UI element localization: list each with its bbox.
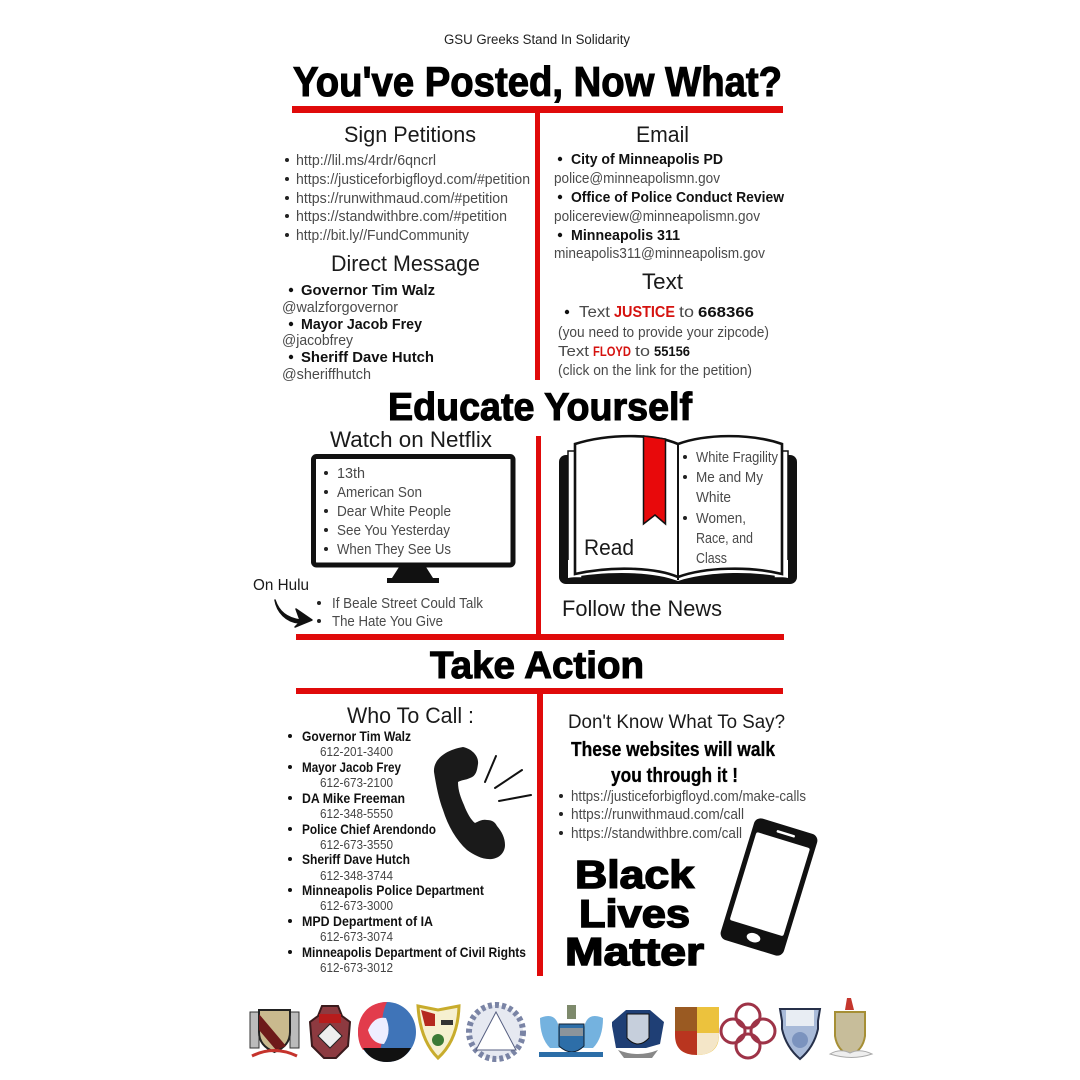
phone contacts list: Mayor Jacob Frey [302,760,401,775]
phone contacts list: 612-201-3400 [320,745,393,759]
book titles list: Women, [696,511,746,527]
heading: don't know what to say: Don't Know What To Say? [568,712,785,733]
email contacts: police@minneapolismn.gov [554,171,721,187]
crest 6 [539,1005,603,1057]
phone contacts list: 612-673-3550 [320,838,393,852]
text justice instruction: Text [579,304,611,321]
slogan: black lives matter: Matter [565,931,704,974]
email contacts [554,152,785,262]
phone contacts list: Minneapolis Department of Civil Rights [302,945,526,960]
panel: text campaigns [558,269,769,379]
netflix titles list [324,466,451,558]
petition links list: https://justiceforbigfloyd.com/#petition [296,172,530,188]
crest 7 [612,1010,664,1058]
netflix titles list: American Son [337,485,422,501]
heading: sign petitions: Sign Petitions [344,122,476,147]
panel: email [554,122,785,262]
netflix titles list: Dear White People [337,504,451,520]
direct message contacts [282,283,435,383]
panel: watch [253,427,513,630]
text justice instruction: 668366 [698,304,754,321]
direct message contacts: Governor Tim Walz [301,283,435,299]
direct message contacts: @sheriffhutch [282,367,371,383]
petition links list: https://runwithmaud.com/#petition [296,191,508,207]
text floyd instruction: (click on the link for the petition) [558,363,752,379]
email contacts: policereview@minneapolismn.gov [554,209,761,225]
crest 9 [721,1004,775,1058]
hulu titles list: The Hate You Give [332,614,443,630]
email contacts: Office of Police Conduct Review [571,190,785,206]
organiser line: GSU Greeks Stand In Solidarity [444,32,630,47]
text floyd instruction: Text [558,344,589,360]
email contacts: City of Minneapolis PD [571,152,723,168]
netflix titles list: See You Yesterday [337,523,451,539]
crest 8 [675,1007,719,1055]
phone contacts list: 612-348-3744 [320,869,393,883]
book titles list: Race, and [696,531,753,547]
netflix titles list: 13th [337,466,365,482]
section two red dividers [296,436,784,640]
text floyd instruction [558,343,752,379]
phone contacts list: Police Chief Arendondo [302,822,436,837]
book titles list: Class [696,551,727,567]
text justice instruction: (you need to provide your zipcode) [558,325,769,341]
text floyd instruction: to [635,344,650,360]
panel: direct message [282,251,480,383]
icon: curved arrow [275,600,312,627]
icon: smartphone [719,817,819,957]
netflix titles list: When They See Us [337,542,451,558]
phone contacts list: 612-673-3012 [320,961,393,975]
slogan: black lives matter: Lives [579,893,690,936]
book titles list [683,450,779,567]
label: on hulu: On Hulu [253,577,309,594]
direct message contacts: @jacobfrey [282,333,354,349]
book titles list: White Fragility [696,450,779,466]
heading: educate yourself: Educate Yourself [388,386,693,429]
call script links list: https://standwithbre.com/call [571,826,742,842]
email contacts: mineapolis311@minneapolism.gov [554,246,766,262]
text justice instruction: JUSTICE [614,304,675,321]
icon: monitor [314,456,513,583]
direct message contacts: Sheriff Dave Hutch [301,350,434,366]
heading: take action: Take Action [430,645,644,687]
text floyd instruction: 55156 [654,343,690,359]
bold subheading: websites: you through it ! [611,765,738,787]
panel: sign petitions [285,122,530,244]
slogan: black lives matter: Black [575,854,694,897]
bold subheading: websites [571,739,776,787]
heading: who to call: Who To Call : [347,703,474,728]
icon: red bookmark [644,436,666,524]
crest 5 [469,1005,523,1059]
panel: read [559,436,797,584]
section one red dividers [292,106,783,380]
heading: email: Email [636,122,689,147]
label: read: Read [584,535,634,560]
crest 1 [250,1010,299,1056]
phone contacts list: DA Mike Freeman [302,791,405,806]
crest 10 [780,1009,820,1059]
phone contacts list: 612-673-2100 [320,776,393,790]
heading: direct message: Direct Message [331,251,480,276]
slogan: black lives matter [565,854,704,974]
phone contacts list: Sheriff Dave Hutch [302,852,410,867]
crest 11 [830,998,872,1058]
book titles list: Me and My [696,470,764,486]
direct message contacts: Mayor Jacob Frey [301,317,422,333]
panel: who to call [288,703,531,975]
phone contacts list: 612-348-5550 [320,807,393,821]
text justice instruction: to [679,304,694,321]
heading: watch on netflix: Watch on Netflix [330,427,492,452]
petition links list [285,153,530,244]
phone contacts list: Minneapolis Police Department [302,883,484,898]
heading: follow the news: Follow the News [562,596,722,621]
phone contacts list: Governor Tim Walz [302,729,411,744]
call script links list [559,789,806,842]
phone contacts list: 612-673-3074 [320,930,393,944]
call script links list: https://justiceforbigfloyd.com/make-calls [571,789,806,805]
phone contacts list: MPD Department of IA [302,914,433,929]
text justice instruction [558,304,769,341]
heading: text: Text [642,269,683,294]
crest 4 [418,1006,459,1058]
phone contacts list [288,729,526,975]
crest 2 [310,1006,350,1058]
icon: ringing telephone handset [434,747,531,859]
petition links list: https://standwithbre.com/#petition [296,209,507,225]
hulu titles list [317,596,484,630]
petition links list: http://lil.ms/4rdr/6qncrl [296,153,436,169]
book titles list: White [696,490,731,506]
text floyd instruction: FLOYD [593,343,631,359]
panel: what to say [559,712,819,974]
section three red dividers [296,688,783,976]
hulu titles list: If Beale Street Could Talk [332,596,484,612]
row of greek organisation crests [250,998,872,1062]
icon: open book [559,436,797,584]
email contacts: Minneapolis 311 [571,228,680,244]
title: You've Posted, Now What? [293,58,782,105]
phone contacts list: 612-673-3000 [320,899,393,913]
crest 3 [358,1002,416,1062]
petition links list: http://bit.ly//FundCommunity [296,228,470,244]
bold subheading: websites: These websites will walk [571,739,776,761]
call script links list: https://runwithmaud.com/call [571,807,744,823]
direct message contacts: @walzforgovernor [282,300,398,316]
